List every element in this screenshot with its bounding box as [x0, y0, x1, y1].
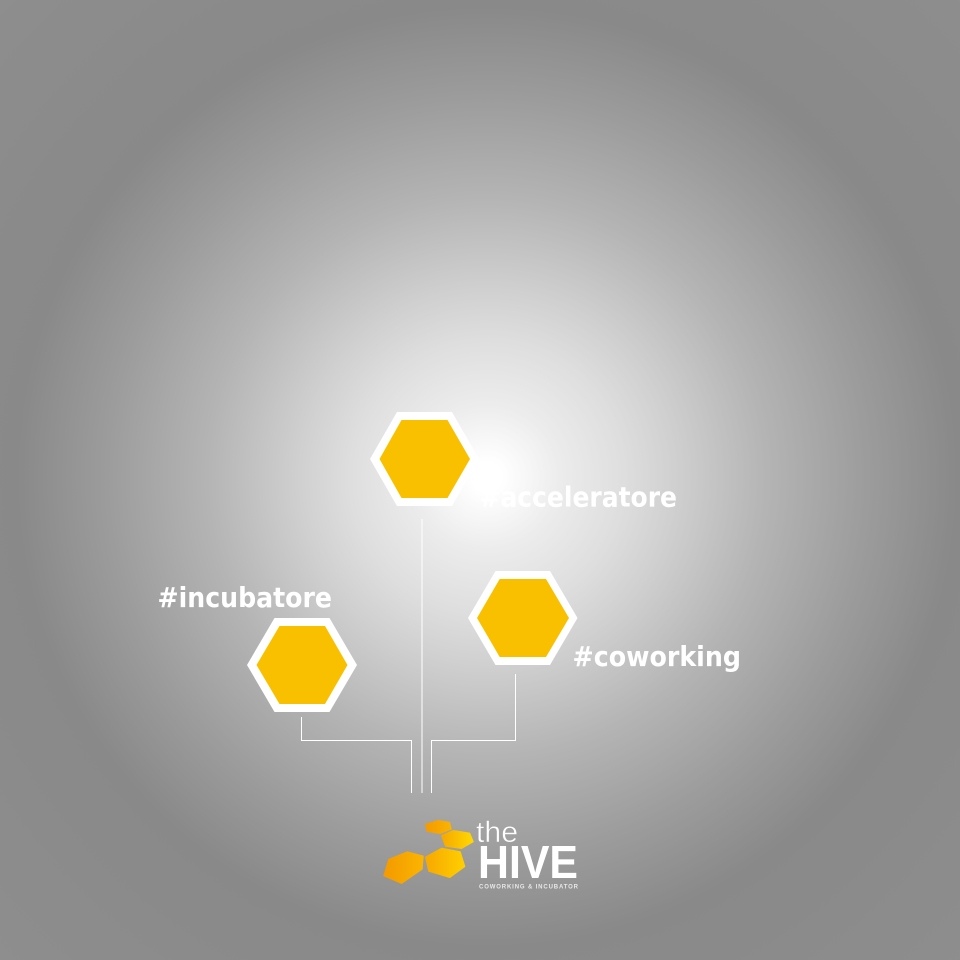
logo: the HIVE: [384, 816, 579, 890]
connector: coworking to logo: [432, 674, 516, 793]
label: incubatore: #incubatore: [158, 582, 332, 614]
label: acceleratore: #acceleratore: [480, 482, 677, 514]
connector: acceleratore to logo: [421, 519, 423, 793]
logo tagline: COWORKING & INCUBATOR: [479, 884, 579, 890]
hexagon: coworking: [468, 571, 578, 665]
logo wordmark: the: the: [476, 816, 518, 849]
logo hexagons: [384, 821, 473, 883]
hexagon: incubatore: [247, 618, 357, 712]
connector: incubatore to logo: [302, 717, 412, 793]
label: coworking: #coworking: [572, 641, 741, 673]
logo wordmark: HIVE: HIVE: [478, 836, 578, 888]
hexagon: acceleratore: [370, 412, 479, 506]
